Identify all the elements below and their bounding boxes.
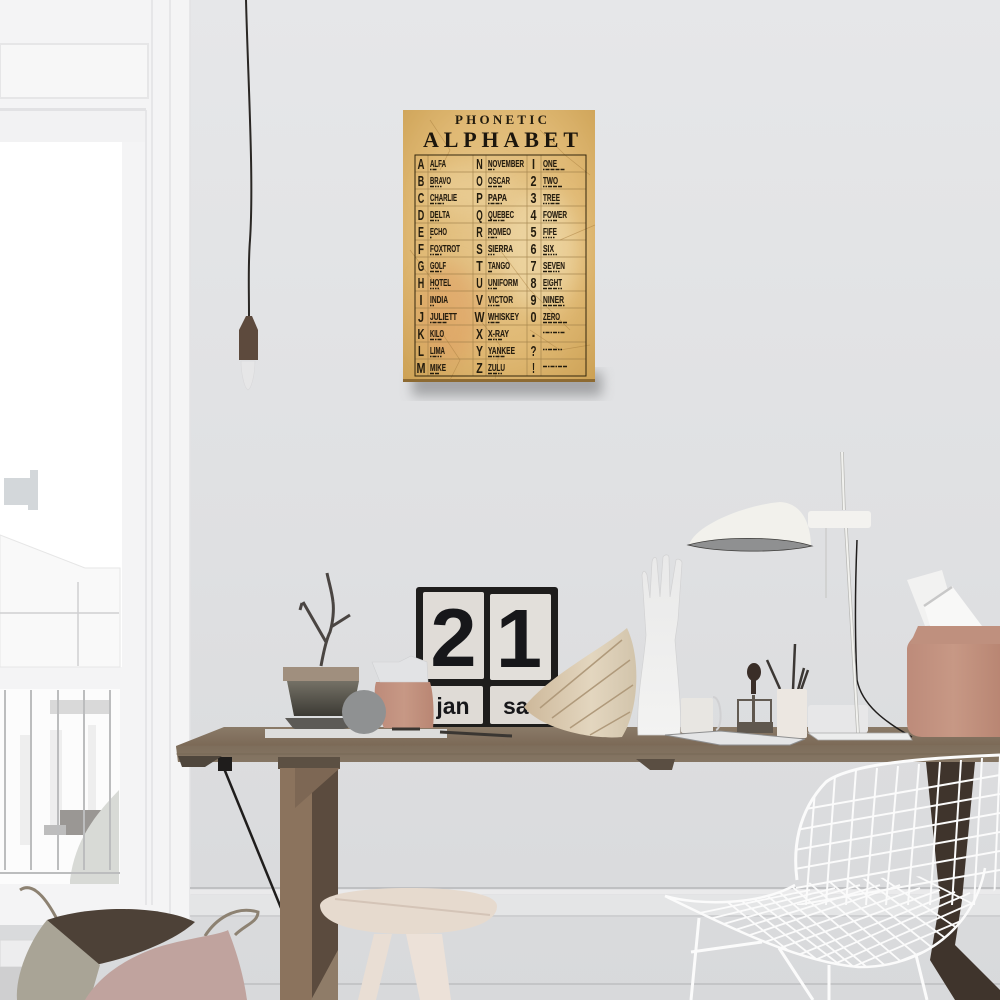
R: R xyxy=(476,224,483,241)
U: UNIFORM xyxy=(488,278,518,289)
H: HOTEL xyxy=(430,278,451,289)
column 1: A to M xyxy=(416,156,460,377)
Q xyxy=(476,207,514,224)
P: PAPA xyxy=(488,193,507,204)
grey ball xyxy=(342,690,386,734)
basket interior xyxy=(47,909,195,965)
5 xyxy=(530,224,557,241)
calendar xyxy=(416,587,558,729)
6 xyxy=(530,241,557,258)
period xyxy=(531,324,564,341)
L xyxy=(418,343,445,360)
E: E xyxy=(418,224,424,241)
wainscot panelling xyxy=(190,888,1000,984)
potted branch xyxy=(283,573,359,731)
pole xyxy=(842,452,858,733)
Q: Q xyxy=(476,207,483,224)
chair seat outline xyxy=(665,868,985,967)
J: JULIETT xyxy=(430,312,457,323)
4: 4 xyxy=(530,207,537,224)
K: K xyxy=(418,326,425,343)
pencil holder xyxy=(767,644,808,738)
B: B xyxy=(418,173,424,190)
S xyxy=(476,241,513,258)
basket xyxy=(17,888,258,1000)
2: 2 xyxy=(530,173,536,190)
stool legs xyxy=(358,934,392,1000)
4: FOWER xyxy=(543,210,568,221)
G xyxy=(418,258,446,275)
K xyxy=(418,326,444,343)
Z xyxy=(476,360,505,377)
N: NOVEMBER xyxy=(488,159,524,170)
table centre bracket xyxy=(636,759,675,770)
column 2: N to Z xyxy=(474,156,524,377)
R xyxy=(476,224,511,241)
pull cord xyxy=(825,528,827,598)
X: X-RAY xyxy=(488,329,509,340)
paper scrolls xyxy=(907,570,982,626)
4 xyxy=(530,207,568,224)
N: N xyxy=(476,156,483,173)
exclamation mark: ! xyxy=(532,360,535,377)
chair back outline xyxy=(796,755,1000,880)
A: A xyxy=(418,156,425,173)
C xyxy=(418,190,457,207)
N xyxy=(476,156,524,173)
E: ECHO xyxy=(430,227,447,238)
desk lamp xyxy=(688,452,912,740)
tile: sat: sa xyxy=(503,693,529,719)
6: SIX xyxy=(543,244,554,255)
table top xyxy=(176,727,1000,762)
Y xyxy=(476,343,515,360)
Z: ZULU xyxy=(488,363,505,374)
T: T xyxy=(476,258,483,275)
tile: jan xyxy=(425,686,483,724)
I xyxy=(420,292,448,309)
chair back mesh xyxy=(795,756,1000,905)
W: W xyxy=(474,309,485,326)
P: P xyxy=(476,190,483,207)
G: GOLF xyxy=(430,261,446,272)
question mark xyxy=(530,343,562,360)
mug xyxy=(681,697,721,733)
8: EIGHT xyxy=(543,278,562,289)
V xyxy=(476,292,514,309)
H xyxy=(418,275,451,292)
5: 5 xyxy=(530,224,536,241)
cord xyxy=(246,0,251,316)
7: 7 xyxy=(530,258,536,275)
M: MIKE xyxy=(430,363,446,374)
tile: 2: 2 xyxy=(430,591,477,684)
2 xyxy=(530,173,562,190)
outside building xyxy=(0,470,120,884)
notebook xyxy=(665,731,805,745)
0 xyxy=(530,309,567,326)
0: 0 xyxy=(530,309,536,326)
V: V xyxy=(476,292,483,309)
V: VICTOR xyxy=(488,295,514,306)
L: L xyxy=(418,343,424,360)
A xyxy=(418,156,446,173)
base xyxy=(808,733,912,740)
F: FOXTROT xyxy=(430,244,460,255)
1: I xyxy=(532,156,535,173)
O xyxy=(476,173,510,190)
2: TWO xyxy=(543,176,558,187)
0: ZERO xyxy=(543,312,560,323)
R: ROMEO xyxy=(488,227,511,238)
pot xyxy=(285,667,359,716)
K: KILO xyxy=(430,329,444,340)
lamp cable xyxy=(856,540,912,737)
paper roll behind xyxy=(808,705,868,733)
O: O xyxy=(476,173,483,190)
L: LIMA xyxy=(430,346,445,357)
F xyxy=(418,241,460,258)
column 3: numbers and punctuation xyxy=(530,156,568,377)
I: I xyxy=(420,292,422,309)
branch xyxy=(300,573,350,666)
J: J xyxy=(418,309,424,326)
window and casing xyxy=(0,0,190,1000)
C: C xyxy=(418,190,424,207)
chair legs xyxy=(691,918,927,1000)
I: INDIA xyxy=(430,295,448,306)
O: OSCAR xyxy=(488,176,510,187)
basket handles xyxy=(20,888,258,936)
T: TANGO xyxy=(488,261,510,272)
G: G xyxy=(418,258,424,275)
shade xyxy=(689,502,811,545)
D: DELTA xyxy=(430,210,450,221)
B: BRAVO xyxy=(430,176,451,187)
9 xyxy=(530,292,565,309)
tile: jan: jan xyxy=(435,693,470,719)
terracotta pot xyxy=(372,656,434,728)
basket weave xyxy=(17,920,100,1000)
C: CHARLIE xyxy=(430,193,457,204)
M: M xyxy=(416,360,426,377)
period: . xyxy=(531,324,536,341)
wooden stamp xyxy=(737,663,773,733)
socket xyxy=(239,316,258,360)
X xyxy=(476,326,509,343)
poster shadow xyxy=(412,372,602,396)
8: 8 xyxy=(530,275,536,292)
9: 9 xyxy=(530,292,536,309)
5: FIFE xyxy=(543,227,557,238)
Y: YANKEE xyxy=(488,346,515,357)
wire chair xyxy=(665,755,1000,1000)
paintbrush xyxy=(392,729,512,736)
1: ONE xyxy=(543,159,557,170)
folded paper fan book xyxy=(524,628,636,737)
J xyxy=(418,309,457,326)
Q: QUEBEC xyxy=(488,210,514,221)
terracotta vase xyxy=(907,626,1000,737)
bulb xyxy=(241,361,255,390)
poster: phonetic alphabet xyxy=(403,110,595,382)
table leg left xyxy=(278,757,340,1000)
H: H xyxy=(418,275,424,292)
table grid xyxy=(415,155,586,376)
exclamation mark xyxy=(532,360,567,377)
T xyxy=(476,258,510,275)
3: 3 xyxy=(530,190,536,207)
E xyxy=(418,224,447,241)
D xyxy=(418,207,450,224)
white glove hand mould xyxy=(638,555,682,735)
question mark: ? xyxy=(530,343,536,360)
pink blanket xyxy=(85,930,247,1000)
S: S xyxy=(476,241,483,258)
stool seat xyxy=(320,888,497,934)
8 xyxy=(530,275,562,292)
W: WHISKEY xyxy=(488,312,519,323)
U: U xyxy=(476,275,483,292)
pendant lamp xyxy=(239,0,258,390)
B xyxy=(418,173,451,190)
chair seat mesh xyxy=(701,876,972,966)
U xyxy=(476,275,518,292)
desk rod and clip xyxy=(178,756,281,908)
W xyxy=(474,309,519,326)
tile: 1: 1 xyxy=(496,592,542,685)
3 xyxy=(530,190,560,207)
arm xyxy=(808,511,871,528)
9: NINER xyxy=(543,295,565,306)
F: F xyxy=(418,241,424,258)
7 xyxy=(530,258,565,275)
table leg right xyxy=(926,762,1000,1000)
S: SIERRA xyxy=(488,244,513,255)
X: X xyxy=(476,326,483,343)
P xyxy=(476,190,507,207)
Z: Z xyxy=(476,360,483,377)
paper stack under objects xyxy=(265,729,447,738)
7: SEVEN xyxy=(543,261,565,272)
1 xyxy=(532,156,564,173)
D: D xyxy=(418,207,424,224)
A: ALFA xyxy=(430,159,446,170)
wooden stool xyxy=(320,888,497,1000)
Y: Y xyxy=(476,343,483,360)
heading: Phonetic: PHONETIC xyxy=(455,112,547,127)
tile: sat xyxy=(490,686,551,724)
saucer xyxy=(285,718,348,731)
3: TREE xyxy=(543,193,560,204)
M xyxy=(416,360,446,377)
heading: Alphabet: ALPHABET xyxy=(423,127,578,152)
6: 6 xyxy=(530,241,536,258)
